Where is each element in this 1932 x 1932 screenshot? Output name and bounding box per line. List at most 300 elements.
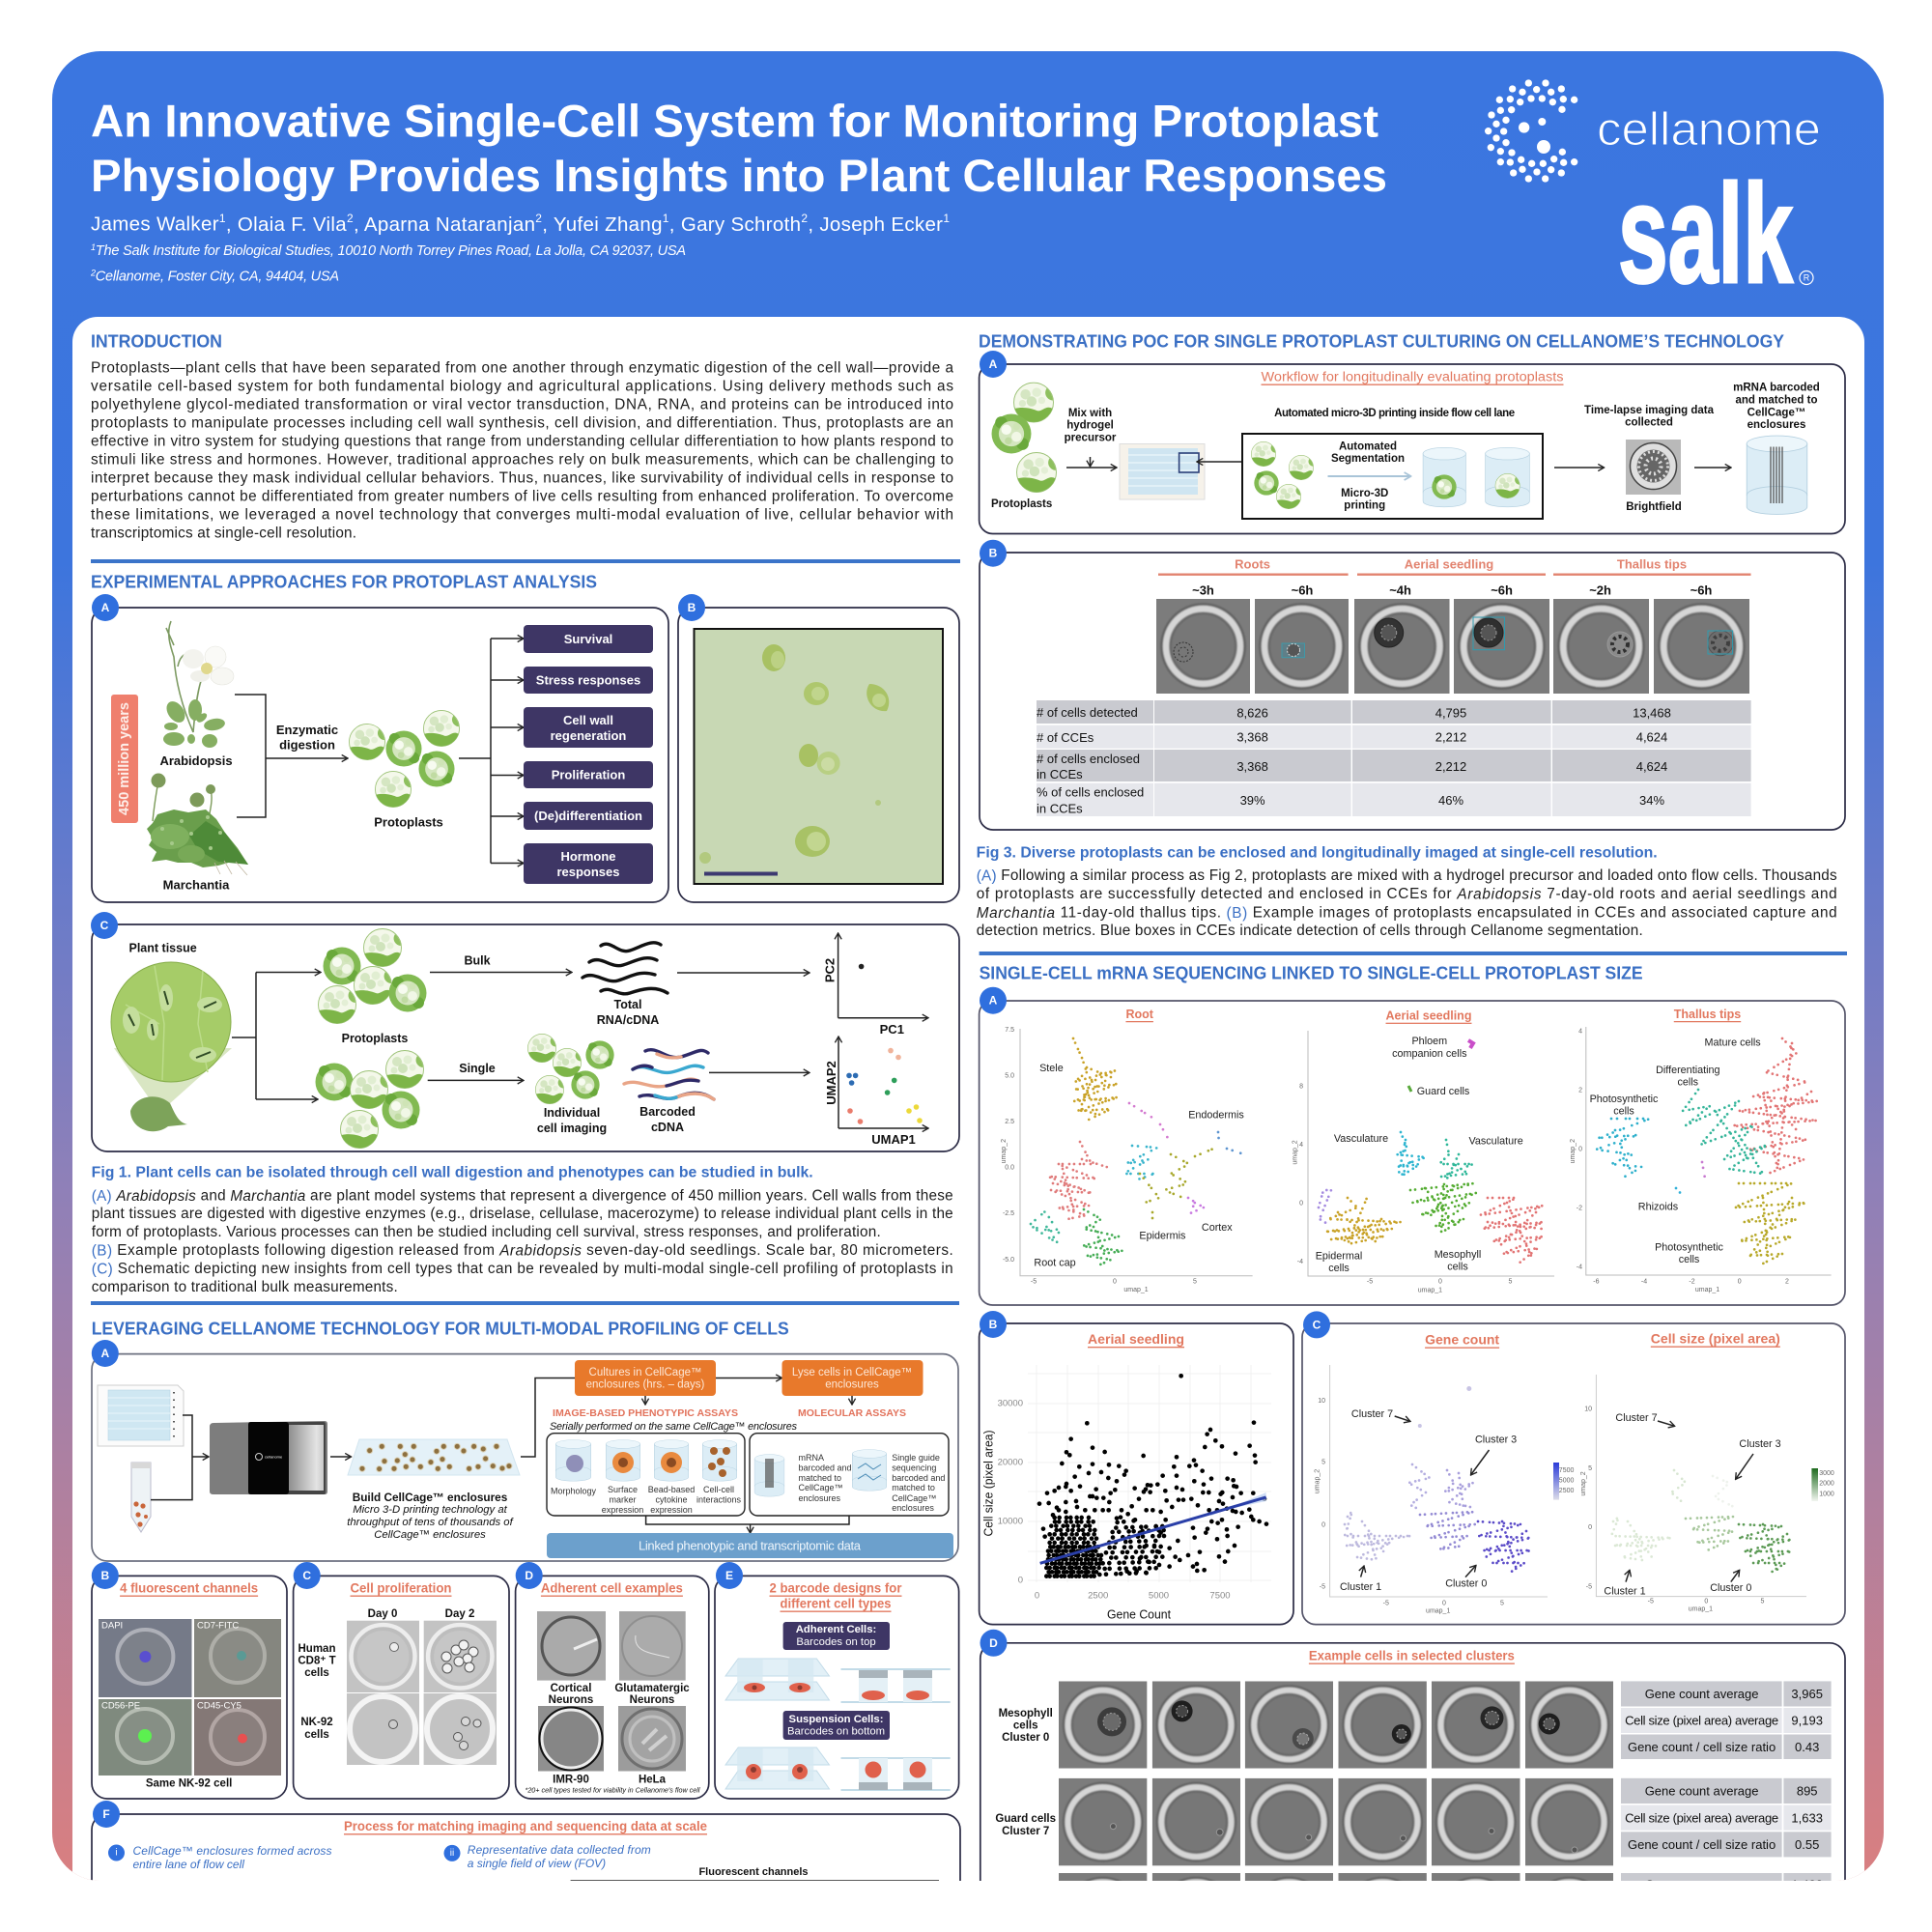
time labels bbox=[1192, 583, 1712, 597]
logo: salk: salk bbox=[1618, 156, 1793, 312]
chart: gene count UMAP: 10 bbox=[1318, 1398, 1325, 1405]
authors: , Gary Schroth bbox=[669, 213, 801, 236]
titles: Gene count bbox=[1425, 1333, 1500, 1347]
authors: 2 bbox=[535, 212, 542, 225]
titles: Aerial seedling bbox=[1386, 1009, 1471, 1023]
title: 4 fluorescent channels bbox=[120, 1580, 258, 1596]
box: cultures bbox=[575, 1360, 716, 1396]
chart: thallus UMAP: cells bbox=[1679, 1254, 1700, 1265]
adherent cell images: HeLa bbox=[639, 1774, 667, 1785]
chart: cell size vs gene count: 30000 bbox=[998, 1399, 1023, 1408]
outcome boxes: Stress responses bbox=[536, 672, 640, 688]
logo: cellanome: cellanome bbox=[1597, 104, 1821, 156]
row labels: Cluster 7 bbox=[1002, 1826, 1049, 1837]
chart: gene count UMAP: Cluster 7 bbox=[1351, 1408, 1393, 1420]
label: 450 million years bbox=[111, 695, 138, 823]
chart: gene count UMAP: Cluster 3 bbox=[1475, 1435, 1517, 1446]
label: Marchantia: Marchantia bbox=[163, 877, 230, 893]
panel: technology A workflow bbox=[92, 1340, 958, 1561]
chart: PCA axes: PC1 bbox=[880, 1022, 904, 1037]
panel: sequencing B scatter bbox=[980, 1311, 1293, 1625]
label: total RNA bbox=[597, 999, 659, 1024]
chart: root UMAP: Cortex bbox=[1202, 1222, 1233, 1234]
metrics table: 39% bbox=[1240, 793, 1265, 808]
box: molecular assays: Single guide bbox=[892, 1453, 940, 1463]
chart: aerial seedling UMAP: umap_2 bbox=[1293, 1140, 1298, 1165]
chart: cell size UMAP: 5 bbox=[1760, 1598, 1764, 1605]
chart: aerial seedling UMAP: 8 bbox=[1299, 1084, 1303, 1090]
adherent cell images: Neurons bbox=[549, 1694, 593, 1706]
title: different cell types bbox=[781, 1596, 891, 1611]
label: build CellCage enclosures: Build CellCage™ enclosures bbox=[353, 1491, 508, 1504]
icon: barcoded cylinder bbox=[1747, 436, 1807, 514]
text block: introduction: transcriptomics at single-cell resolution. bbox=[91, 526, 356, 541]
bar: linked data bbox=[547, 1533, 953, 1558]
label: mix with hydrogel: Mix with bbox=[1068, 408, 1112, 419]
chart: cell size UMAP: 3000 bbox=[1819, 1470, 1834, 1477]
chart: cell size UMAP: 0 bbox=[1588, 1524, 1592, 1531]
metrics table: 4,795 bbox=[1435, 705, 1466, 721]
chart: gene count UMAP: 5 bbox=[1321, 1459, 1325, 1466]
chart: aerial seedling UMAP: Vasculature bbox=[1468, 1136, 1523, 1148]
box: phenotypic assays: Morphology bbox=[551, 1487, 597, 1496]
label: barcoded cDNA bbox=[639, 1105, 696, 1134]
caption: figure 1: form of protoplasts. Various processes can then be studied including cell survival, stress responses, and proliferation. bbox=[92, 1224, 881, 1240]
label: time-lapse: collected bbox=[1625, 416, 1673, 428]
title: Cell proliferation bbox=[350, 1580, 452, 1596]
time labels: ~6h bbox=[1690, 583, 1712, 597]
authors: , Aparna Nataranjan bbox=[354, 213, 535, 236]
metrics table: # of cells detected bbox=[1037, 705, 1138, 720]
chart: thallus UMAP: 0 bbox=[1738, 1279, 1742, 1285]
box: printing bbox=[1242, 434, 1543, 519]
chart: aerial seedling UMAP: Mesophyll bbox=[1435, 1249, 1481, 1261]
chart: PCA axes: PC2 bbox=[823, 958, 837, 982]
panel: experimental A: A bbox=[101, 601, 110, 614]
step ii: a single field of view (FOV) bbox=[468, 1857, 606, 1870]
column labels bbox=[368, 1608, 474, 1620]
authors: James Walker bbox=[91, 213, 219, 236]
panel: technology E barcode designs: E bbox=[725, 1569, 733, 1582]
icon: barcoded cDNA bbox=[624, 1050, 714, 1099]
metrics: cluster 0: Cell size (pixel area) average bbox=[1625, 1714, 1778, 1727]
chart: gene count UMAP: 7500 bbox=[1559, 1467, 1574, 1474]
label: fluorescent channels: Fluorescent channels bbox=[698, 1866, 809, 1878]
chart: aerial seedling UMAP: Phloem bbox=[1411, 1036, 1447, 1047]
chart: cell size UMAP bbox=[1580, 1375, 1834, 1613]
heading: experimental approaches: EXPERIMENTAL APPROACHES FOR PROTOPLAST ANALYSIS bbox=[91, 573, 597, 592]
chart: cell size UMAP: 5 bbox=[1588, 1465, 1592, 1472]
caption: figure 1: plant tissues are digested with digestive enzymes (e.g., driselase, cellulase, macerozyme) to release individual plant cells in the bbox=[92, 1206, 953, 1222]
row labels bbox=[995, 1708, 1056, 1837]
caption: figure 1: comparison to traditional bulk measurements. bbox=[92, 1279, 398, 1295]
chart: gene count UMAP: umap_2 bbox=[1314, 1469, 1321, 1493]
panel: technology D adherent cells bbox=[516, 1562, 709, 1799]
panel: technology A workflow: A bbox=[100, 1347, 109, 1360]
metrics table: 4,624 bbox=[1636, 759, 1667, 774]
icon: marchantia plant bbox=[147, 773, 248, 875]
caption: figure 3: (A) Following a similar process as Fig 2, protoplasts are mixed with a hydrogel precursor and loaded onto flow cells. Thousands bbox=[977, 867, 1837, 884]
label: single arrow bbox=[428, 1062, 524, 1080]
chart: gene count UMAP: -5 bbox=[1320, 1584, 1325, 1590]
caption: figure 3 bbox=[977, 844, 1837, 939]
step ii: Representative data collected from bbox=[468, 1843, 651, 1857]
micrograph of protoplasts bbox=[694, 629, 943, 884]
panel: POC A workflow: A bbox=[989, 357, 998, 371]
chart: root UMAP: 7.5 bbox=[1005, 1027, 1014, 1034]
tissue headers: Roots bbox=[1235, 556, 1270, 572]
arrow: to printing bbox=[330, 1456, 352, 1458]
image row: mesophyll bbox=[1059, 1681, 1613, 1769]
metrics: third cluster (clipped): Gene count average bbox=[1645, 1878, 1759, 1891]
panel: technology F matching process: F bbox=[102, 1807, 110, 1821]
chart: cell size UMAP: Cluster 1 bbox=[1604, 1585, 1646, 1597]
outcome boxes: responses bbox=[556, 865, 620, 879]
chart: thallus UMAP: -2 bbox=[1689, 1279, 1695, 1285]
text block: introduction: versatile cell-based system for both fundamental biology and agricultural applications. Using delivery methods such as bbox=[91, 379, 953, 394]
chart: root UMAP: 2.5 bbox=[1005, 1119, 1014, 1125]
chart: cell size vs gene count: 5000 bbox=[1149, 1590, 1169, 1602]
chart: root UMAP: -5 bbox=[1031, 1279, 1037, 1285]
title: Process for matching imaging and sequencing data at scale bbox=[344, 1819, 707, 1833]
title: Aerial seedling bbox=[1088, 1332, 1184, 1347]
label: protoplasts: Protoplasts bbox=[342, 1032, 408, 1045]
box: phenotypic assays: Cell-cell bbox=[703, 1485, 734, 1494]
panel: sequencing B scatter: B bbox=[989, 1318, 998, 1331]
tissue headers: Thallus tips bbox=[1617, 556, 1687, 572]
metrics: cluster 7: 0.55 bbox=[1795, 1837, 1819, 1852]
adherent cell images: Cortical bbox=[551, 1683, 591, 1694]
box: adherent cells bbox=[783, 1622, 890, 1650]
panel: sequencing A UMAPs: A bbox=[989, 994, 998, 1008]
box: phenotypic assays: Bead-based bbox=[648, 1485, 695, 1494]
text block: introduction: these limitations, we leveraged a novel technology that converges multi-modal evaluation of live, cellular behavior with bbox=[91, 506, 953, 524]
caption: figure 1 bbox=[92, 1165, 953, 1295]
time labels: ~3h bbox=[1192, 583, 1214, 597]
chart: UMAP axes bbox=[824, 1037, 928, 1147]
chart: gene count UMAP: Cluster 0 bbox=[1445, 1578, 1487, 1590]
box: phenotypic assays: marker bbox=[609, 1495, 637, 1505]
chart: thallus UMAP: Rhizoids bbox=[1638, 1202, 1679, 1213]
chart: aerial seedling UMAP bbox=[1293, 1031, 1554, 1294]
arrow: digestion bracket bbox=[235, 695, 348, 817]
metrics: cluster 0: 9,193 bbox=[1791, 1714, 1823, 1727]
authors: 2 bbox=[801, 212, 808, 225]
text block: introduction: effective in vitro system for studying questions that range from understanding cellular differentiation to how plants respond to bbox=[91, 433, 953, 450]
panel: sequencing C feature plots: C bbox=[1313, 1318, 1321, 1331]
heading: image-based assays: IMAGE-BASED PHENOTYPIC ASSAYS bbox=[553, 1407, 738, 1419]
label: time-lapse bbox=[1584, 405, 1715, 428]
label: total RNA: Total bbox=[614, 998, 641, 1011]
text block: introduction: interpret because they mask individual cellular behaviors. Thus, nuances, like survivability of individual cells in response to bbox=[91, 469, 953, 487]
box: cultures: enclosures (hrs. – days) bbox=[586, 1379, 705, 1391]
label: time-lapse: Time-lapse imaging data bbox=[1584, 405, 1715, 416]
box: molecular assays: barcoded and bbox=[892, 1473, 945, 1483]
arrows: outcome branches bbox=[459, 639, 524, 864]
fluorescent images: DAPI bbox=[101, 1621, 123, 1631]
chart: aerial seedling UMAP: 5 bbox=[1509, 1279, 1513, 1285]
icon: printed enclosures on flow cell bbox=[348, 1439, 520, 1475]
titles bbox=[1425, 1331, 1780, 1347]
label: Arabidopsis: Arabidopsis bbox=[159, 753, 233, 768]
arrow: to UMAP bbox=[709, 1071, 810, 1073]
panel: technology B fluorescent channels: B bbox=[100, 1569, 109, 1582]
fluorescent images: CD45-CY5 bbox=[197, 1700, 242, 1712]
box: suspension cells: Barcodes on bottom bbox=[787, 1726, 885, 1738]
metrics table: % of cells enclosed bbox=[1037, 784, 1144, 800]
metrics: cluster 7 bbox=[1621, 1778, 1832, 1857]
arrows bbox=[1066, 457, 1117, 468]
metrics table: 13,468 bbox=[1633, 705, 1671, 721]
panel: technology E barcode designs bbox=[715, 1562, 959, 1799]
affiliations bbox=[90, 242, 686, 284]
label: mix with hydrogel: precursor bbox=[1065, 432, 1117, 443]
panel: POC B capture table bbox=[980, 540, 1845, 830]
row labels: cells bbox=[304, 1729, 329, 1741]
metrics table: 2,212 bbox=[1435, 730, 1466, 744]
chart: thallus UMAP bbox=[1570, 1027, 1832, 1293]
label: build CellCage enclosures: throughput of tens of thousands of bbox=[347, 1517, 515, 1528]
chart: thallus UMAP: -2 bbox=[1577, 1206, 1582, 1211]
chart: aerial seedling UMAP: 0 bbox=[1438, 1279, 1442, 1285]
affiliations: 2 bbox=[90, 269, 96, 278]
arrows: to linked data bbox=[646, 1516, 849, 1533]
panel: experimental B micrograph: B bbox=[688, 601, 696, 614]
row labels: cells bbox=[304, 1667, 329, 1679]
chart: gene count UMAP: Cluster 1 bbox=[1340, 1581, 1381, 1593]
metrics table: 3,368 bbox=[1236, 759, 1268, 774]
fluorescent images bbox=[99, 1619, 281, 1776]
label: Same NK-92 cell bbox=[146, 1777, 232, 1789]
chart: cell size vs gene count: 20000 bbox=[998, 1457, 1023, 1468]
icon: individual cells bbox=[527, 1034, 614, 1104]
box: molecular assays: sequencing bbox=[892, 1463, 936, 1473]
panel: technology B fluorescent channels bbox=[92, 1562, 287, 1799]
box: adherent cells: Adherent Cells: bbox=[796, 1624, 876, 1635]
label: plant tissue: Plant tissue bbox=[129, 942, 197, 955]
box: molecular assays bbox=[750, 1434, 949, 1516]
text block: introduction: protoplasts to manipulate processes including cell wall synthesis, cell division, and differentiation. Thus, protoplasts are an bbox=[91, 415, 953, 431]
panel: sequencing D example cells bbox=[980, 1630, 1845, 1932]
chart: root UMAP: Root cap bbox=[1034, 1257, 1076, 1268]
outcome boxes: Hormone bbox=[560, 849, 616, 864]
title: Physiology Provides Insights into Plant Cellular Responses bbox=[91, 151, 1387, 202]
box: phenotypic assays bbox=[547, 1434, 745, 1516]
outcome boxes: regeneration bbox=[551, 728, 626, 743]
step i: CellCage™ enclosures formed across bbox=[133, 1844, 332, 1858]
box: molecular assays: enclosures bbox=[892, 1503, 934, 1513]
tissue headers bbox=[1158, 556, 1750, 575]
chart: thallus UMAP: 2 bbox=[1785, 1279, 1789, 1285]
panel: experimental B micrograph bbox=[678, 594, 959, 902]
panel: experimental C workflow: C bbox=[100, 919, 109, 932]
title: An Innovative Single-Cell System for Monitoring Protoplast bbox=[91, 97, 1378, 147]
chart: gene count UMAP: umap_1 bbox=[1426, 1607, 1450, 1615]
chart: gene count UMAP: 5000 bbox=[1559, 1478, 1574, 1484]
metrics: cluster 7: Cell size (pixel area) average bbox=[1625, 1810, 1778, 1826]
box: molecular assays: CellCage™ bbox=[798, 1483, 843, 1492]
row labels: Human bbox=[298, 1643, 335, 1655]
icon: cellanome instrument bbox=[210, 1421, 327, 1494]
caption: figure 3: Marchantia 11-day-old thallus tips. (B) Example images of protoplasts encapsulated in CCEs and associated capture and bbox=[977, 904, 1837, 922]
authors: 2 bbox=[347, 212, 354, 225]
title: Example cells in selected clusters bbox=[1309, 1648, 1515, 1663]
box: suspension cells bbox=[783, 1711, 890, 1740]
metrics: cluster 7: 1,633 bbox=[1791, 1810, 1823, 1826]
panel: technology C cell proliferation bbox=[294, 1562, 509, 1799]
text block: introduction bbox=[91, 359, 953, 541]
white content area bbox=[72, 317, 1864, 1932]
heading: single-cell mRNA: SINGLE-CELL mRNA SEQUENCING LINKED TO SINGLE-CELL PROTOPLAST SIZE bbox=[980, 964, 1643, 983]
chart: thallus UMAP: umap_2 bbox=[1570, 1139, 1577, 1163]
chart: root UMAP: 0.0 bbox=[1005, 1165, 1014, 1171]
chart: cell size UMAP: umap_1 bbox=[1689, 1605, 1713, 1613]
caption: figure 1: (B) Example protoplasts following digestion released from Arabidopsis seven-day-old seedlings. Scale bar, 80 micrometers. bbox=[92, 1242, 953, 1259]
icon: flow cell bbox=[1120, 444, 1205, 499]
panel: technology C cell proliferation: C bbox=[302, 1569, 311, 1582]
box: printing: Automated bbox=[1339, 440, 1397, 452]
chart: cell size UMAP: -5 bbox=[1586, 1584, 1592, 1590]
row labels: Guard cells bbox=[995, 1813, 1056, 1825]
label: individual cell imaging bbox=[537, 1106, 607, 1135]
metrics: cluster 7: 895 bbox=[1797, 1783, 1818, 1799]
metrics: cluster 0: Gene count / cell size ratio bbox=[1628, 1740, 1776, 1754]
panel: POC A workflow bbox=[980, 351, 1845, 533]
chart: aerial seedling UMAP: companion cells bbox=[1392, 1048, 1467, 1060]
authors: , Yufei Zhang bbox=[542, 213, 662, 236]
chart: aerial seedling UMAP: -5 bbox=[1367, 1279, 1373, 1285]
icon: cellanome instrument: cellanome bbox=[265, 1455, 283, 1459]
chart: aerial seedling UMAP: Guard cells bbox=[1417, 1086, 1470, 1097]
chart: aerial seedling UMAP: -4 bbox=[1297, 1259, 1303, 1265]
chart: gene count UMAP: 0 bbox=[1442, 1600, 1446, 1607]
box: phenotypic assays: interactions bbox=[696, 1495, 742, 1505]
box: cultures: Cultures in CellCage™ bbox=[589, 1367, 701, 1378]
chart: root UMAP bbox=[1001, 1027, 1253, 1293]
label: mRNA barcoded bbox=[1733, 383, 1820, 431]
metrics: cluster 0: Gene count average bbox=[1645, 1687, 1759, 1701]
panel: sequencing D example cells: D bbox=[989, 1636, 998, 1650]
box: molecular assays: enclosures bbox=[798, 1493, 841, 1503]
outcome boxes bbox=[524, 625, 653, 884]
outcome boxes: (De)differentiation bbox=[534, 809, 642, 823]
step i: entire lane of flow cell bbox=[133, 1858, 244, 1871]
authors: , Joseph Ecker bbox=[808, 213, 943, 236]
chart: thallus UMAP: 4 bbox=[1578, 1028, 1582, 1036]
chart: cell size vs gene count: 0 bbox=[1035, 1590, 1039, 1602]
adherent cell images: IMR-90 bbox=[553, 1774, 589, 1785]
metrics: cluster 0: 0.43 bbox=[1795, 1740, 1819, 1754]
titles: Root bbox=[1125, 1008, 1154, 1021]
icon: suspension barcode diagrams bbox=[725, 1747, 951, 1790]
text block: introduction: stimuli like stress and hormones. However, traditional approaches rely on bulk measurements, which can be challenging to bbox=[91, 452, 953, 468]
step i: i bbox=[115, 1847, 118, 1859]
caption: figure 1: (C) Schematic depicting new insights from cell types that can be revealed by multi-modal single-cell profiling of protoplasts in bbox=[92, 1261, 953, 1277]
chart: thallus UMAP: Photosynthetic bbox=[1590, 1094, 1659, 1105]
authors: 1 bbox=[943, 212, 950, 225]
metrics table bbox=[1037, 700, 1751, 816]
icon: protoplasts bbox=[992, 383, 1056, 492]
chart: root UMAP: Epidermis bbox=[1139, 1230, 1186, 1241]
chart: cell size vs gene count: Gene Count bbox=[1107, 1607, 1172, 1621]
titles: Cell size (pixel area) bbox=[1651, 1331, 1780, 1347]
label: protoplasts: Protoplasts bbox=[991, 498, 1052, 510]
arrow: culture to lyse bbox=[716, 1378, 782, 1379]
chart: gene count UMAP: 2500 bbox=[1559, 1488, 1574, 1494]
panel: experimental A bbox=[92, 594, 668, 902]
chart: thallus UMAP: 0 bbox=[1578, 1146, 1582, 1153]
authors: 1 bbox=[219, 212, 226, 225]
time labels: ~4h bbox=[1389, 583, 1411, 597]
panel: POC B capture table: B bbox=[989, 547, 998, 560]
chart: gene count UMAP: -5 bbox=[1383, 1600, 1389, 1607]
icon: sample tube bbox=[131, 1463, 151, 1532]
panel: experimental C workflow bbox=[91, 912, 959, 1151]
panel: technology D adherent cells: D bbox=[525, 1569, 533, 1582]
logo: cellanome bbox=[1485, 79, 1821, 183]
label: build CellCage enclosures bbox=[347, 1491, 515, 1541]
outcome boxes: Survival bbox=[564, 632, 612, 646]
label: build CellCage enclosures: Micro 3-D printing technology at bbox=[353, 1504, 508, 1516]
chart: cell size UMAP: 2000 bbox=[1819, 1480, 1834, 1488]
heading: molecular assays: MOLECULAR ASSAYS bbox=[798, 1407, 906, 1419]
chart: PCA axes bbox=[823, 933, 928, 1037]
panel: technology F matching process bbox=[92, 1801, 960, 1932]
caption: figure 1: (A) Arabidopsis and Marchantia are plant model systems that represent a divergence of 450 million years. Cell walls from these bbox=[92, 1187, 953, 1204]
caption: figure 3: detection metrics. Blue boxes in CCEs indicate detection of cells through Cellanome segmentation. bbox=[977, 923, 1643, 939]
section: introduction bbox=[91, 332, 953, 541]
chart: root UMAP: Stele bbox=[1039, 1063, 1064, 1074]
chart: thallus UMAP: -4 bbox=[1577, 1264, 1582, 1271]
arrows: into instrument bbox=[151, 1415, 209, 1500]
label: bulk arrow: Bulk bbox=[464, 954, 491, 968]
box: molecular assays: matched to bbox=[798, 1473, 841, 1483]
icon: plant tissue magnified bbox=[111, 962, 232, 1131]
affiliations: The Salk Institute for Biological Studies, 10010 North Torrey Pines Road, La Jolla, CA 92037, USA bbox=[96, 243, 686, 259]
box: phenotypic assays: expression bbox=[602, 1505, 643, 1515]
chart: root UMAP: 0 bbox=[1113, 1279, 1117, 1285]
chart: cell size vs gene count: 0 bbox=[1018, 1575, 1023, 1586]
step ii bbox=[444, 1843, 651, 1870]
box: lyse cells bbox=[782, 1360, 923, 1396]
chart: UMAP axes: UMAP2 bbox=[824, 1061, 838, 1105]
box: molecular assays: barcoded and bbox=[798, 1463, 852, 1473]
chart: gene count UMAP: 5 bbox=[1500, 1600, 1504, 1607]
label: enzymatic digestion: digestion bbox=[279, 738, 335, 752]
chart: UMAP axes: UMAP1 bbox=[871, 1132, 916, 1147]
chart: aerial seedling UMAP: cells bbox=[1328, 1263, 1350, 1274]
chart: cell size UMAP: 0 bbox=[1704, 1598, 1708, 1605]
chart: root UMAP: 5.0 bbox=[1005, 1072, 1014, 1080]
chart: thallus UMAP: cells bbox=[1613, 1106, 1634, 1118]
chart: thallus UMAP: Differentiating bbox=[1656, 1065, 1720, 1076]
row labels: Cluster 0 bbox=[1002, 1732, 1049, 1744]
metrics table: 3,368 bbox=[1236, 730, 1268, 744]
logo: salk: R bbox=[1804, 272, 1810, 282]
metrics table: 4,624 bbox=[1636, 730, 1667, 744]
heading: demonstrating POC: DEMONSTRATING POC FOR SINGLE PROTOPLAST CULTURING ON CELLANOME’S TECHNOLOGY bbox=[979, 332, 1784, 352]
box: printing: printing bbox=[1344, 499, 1385, 511]
image row: third cluster (clipped) bbox=[1059, 1873, 1613, 1932]
authors: , Olaia F. Vila bbox=[226, 213, 347, 236]
chart: thallus UMAP: -4 bbox=[1641, 1279, 1647, 1285]
note: serially performed: Serially performed on the same CellCage™ enclosures bbox=[550, 1421, 798, 1433]
chart: cell size vs gene count: 10000 bbox=[998, 1517, 1023, 1526]
label: enzymatic digestion bbox=[276, 724, 338, 752]
box: phenotypic assays: cytokine bbox=[655, 1495, 688, 1505]
logo: salk bbox=[1620, 179, 1814, 286]
chart: cell size UMAP: Cluster 0 bbox=[1710, 1582, 1751, 1594]
